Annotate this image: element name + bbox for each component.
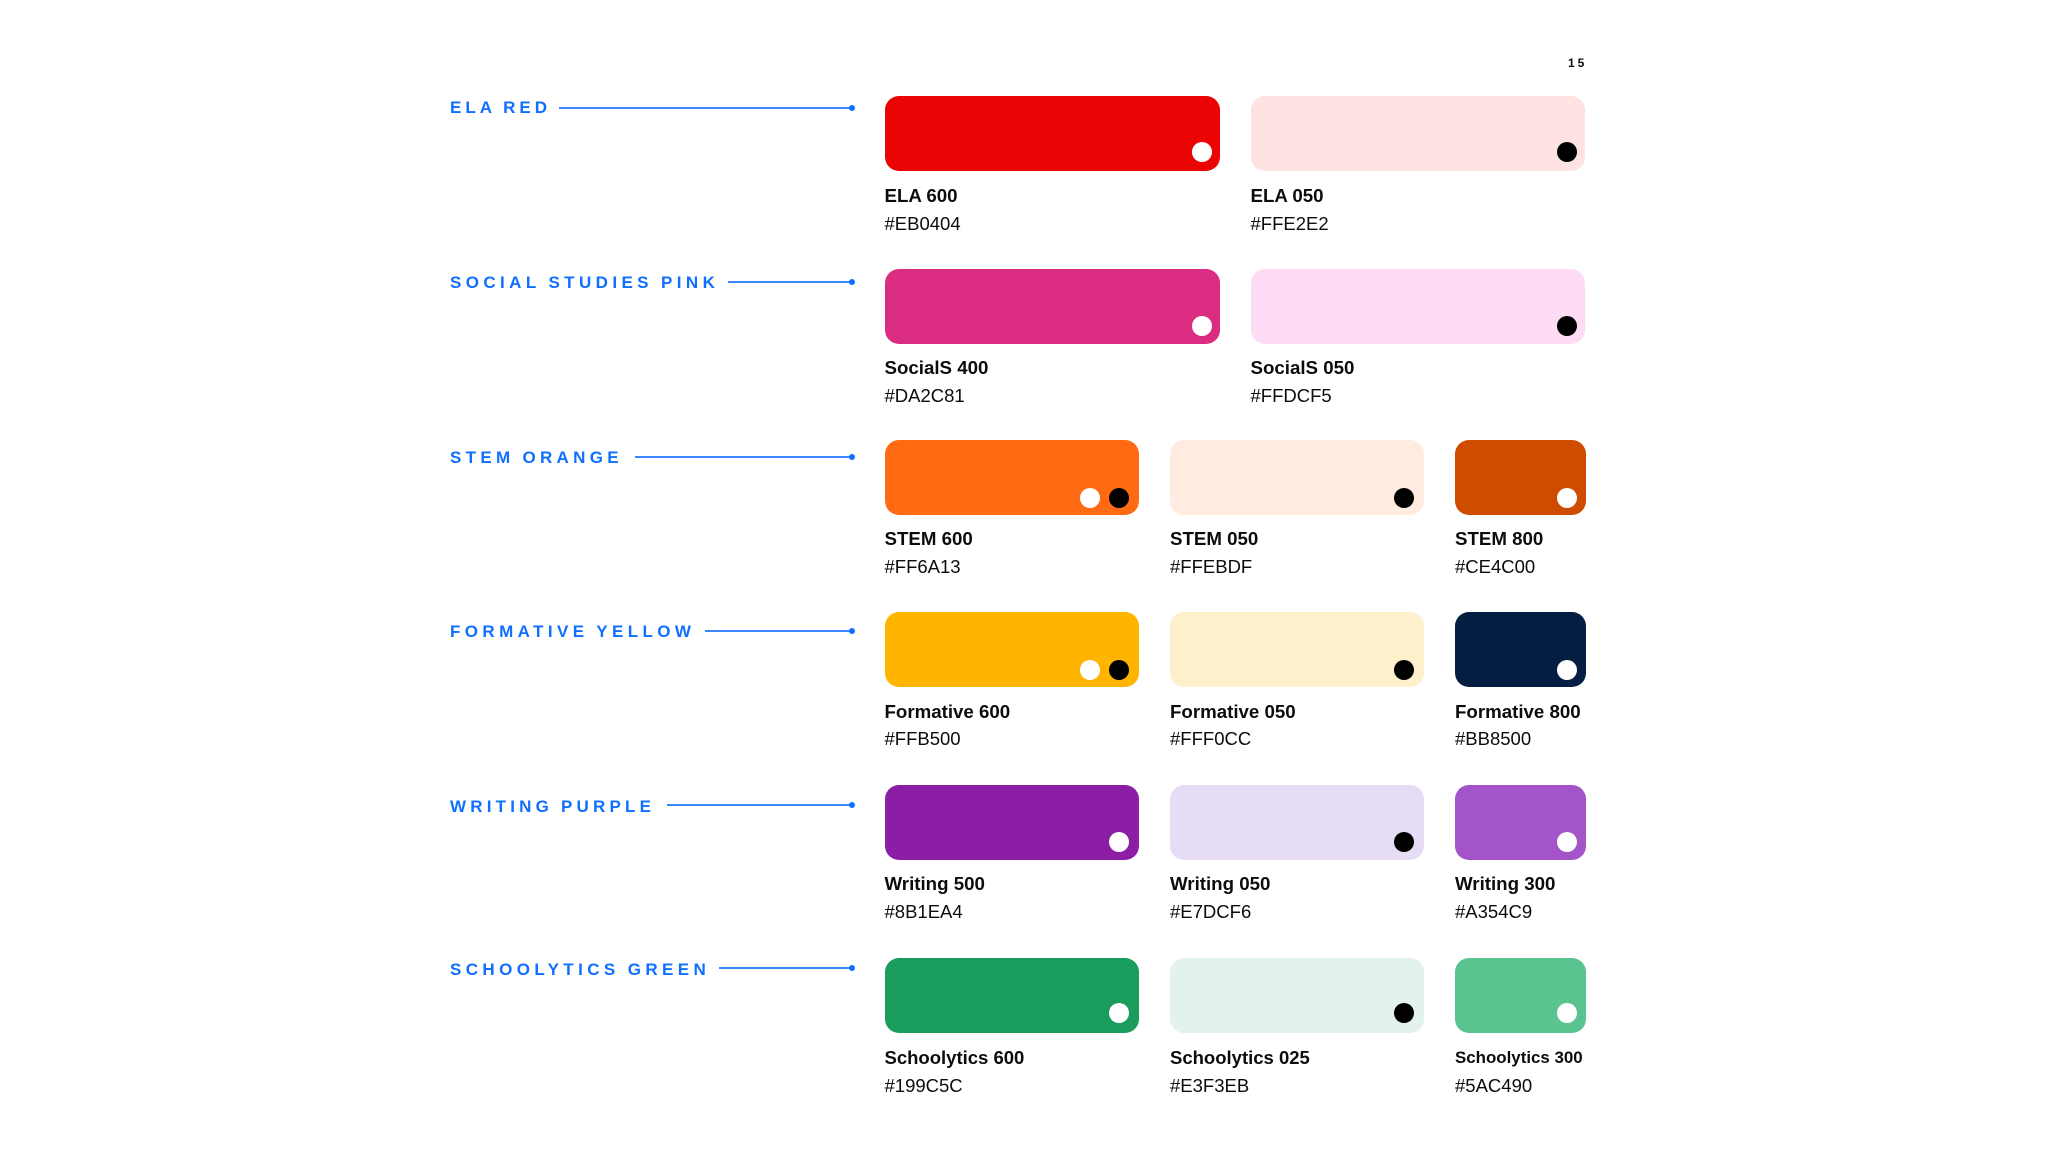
swatch: Writing 500 [884,785,1139,922]
swatch: STEM 800: STEM 800 [1455,528,1543,549]
connector: ELA Red [559,105,855,111]
swatch: ELA 050: ELA 050 [1250,184,1324,206]
row label: Formative Yellow: FORMATIVE YELLOW [450,622,695,641]
swatch: Schoolytics 600: #199C5C [884,1074,963,1096]
swatch: SocialS 050: SocialS 050 [1250,357,1354,378]
swatch: Formative 800: Formative 800 [1455,700,1581,722]
swatch: ELA 600: #EB0404 [884,212,961,234]
row label: Schoolytics Green: SCHOOLYTICS GREEN [450,960,710,979]
swatch: STEM 600 [884,440,1139,576]
swatch: Writing 300: Writing 300 [1455,872,1555,894]
swatch: Formative 600 [884,612,1139,748]
connector: STEM Orange [635,454,855,460]
connector: Schoolytics Green [719,965,855,971]
swatch: Writing 300 [1455,785,1586,922]
swatch: STEM 800: #CE4C00 [1455,556,1535,576]
swatch: SocialS 400: #DA2C81 [884,385,965,406]
swatch: Formative 800: #BB8500 [1455,728,1531,748]
swatch: Writing 050 [1170,785,1424,922]
swatch: Schoolytics 025 [1170,958,1424,1096]
swatch: Schoolytics 025: Schoolytics 025 [1170,1046,1310,1068]
swatch: Schoolytics 600 [884,958,1139,1096]
swatch: Schoolytics 025: #E3F3EB [1170,1074,1249,1096]
swatch: Formative 800 [1455,612,1586,748]
swatch: SocialS 050 [1250,269,1585,406]
swatch: SocialS 400: SocialS 400 [884,357,988,378]
swatch: STEM 050: #FFEBDF [1170,556,1252,576]
swatch: ELA 050: #FFE2E2 [1250,212,1329,234]
swatch: SocialS 400 [884,269,1220,406]
connector: Writing Purple [667,802,855,808]
swatch: Writing 050: #E7DCF6 [1170,900,1251,922]
connector: Social Studies Pink [728,279,855,285]
page number: 15 [1568,56,1587,70]
swatch: Writing 500: Writing 500 [884,872,985,894]
swatch: STEM 050 [1170,440,1424,576]
swatch: ELA 600 [884,96,1220,234]
swatch: Formative 050: Formative 050 [1170,700,1296,722]
swatch: STEM 050: STEM 050 [1170,528,1258,549]
swatch: ELA 050 [1250,96,1585,234]
swatch: Writing 300: #A354C9 [1455,900,1532,922]
swatch: Schoolytics 300 [1455,958,1586,1096]
swatch: STEM 600: #FF6A13 [884,556,961,576]
connector: Formative Yellow [705,628,855,634]
swatch: Schoolytics 300: #5AC490 [1455,1074,1532,1096]
row label: STEM Orange: STEM ORANGE [450,448,623,467]
swatch: Formative 050: #FFF0CC [1170,728,1251,748]
swatch: SocialS 050: #FFDCF5 [1250,385,1332,406]
swatch: Schoolytics 600: Schoolytics 600 [884,1046,1024,1068]
swatch: Formative 050 [1170,612,1424,748]
swatch: Schoolytics 300: Schoolytics 300 [1455,1048,1583,1066]
row label: Writing Purple: WRITING PURPLE [450,797,655,816]
swatch: STEM 600: STEM 600 [884,528,973,549]
swatch: Formative 600: Formative 600 [884,700,1010,722]
swatch: ELA 600: ELA 600 [884,184,958,206]
row label: ELA Red: ELA RED [450,98,551,117]
row label: Social Studies Pink: SOCIAL STUDIES PINK [450,273,719,292]
swatch: Writing 500: #8B1EA4 [884,900,963,922]
swatch: Formative 600: #FFB500 [884,728,961,748]
swatch: Writing 050: Writing 050 [1170,872,1270,894]
swatch: STEM 800 [1455,440,1586,576]
